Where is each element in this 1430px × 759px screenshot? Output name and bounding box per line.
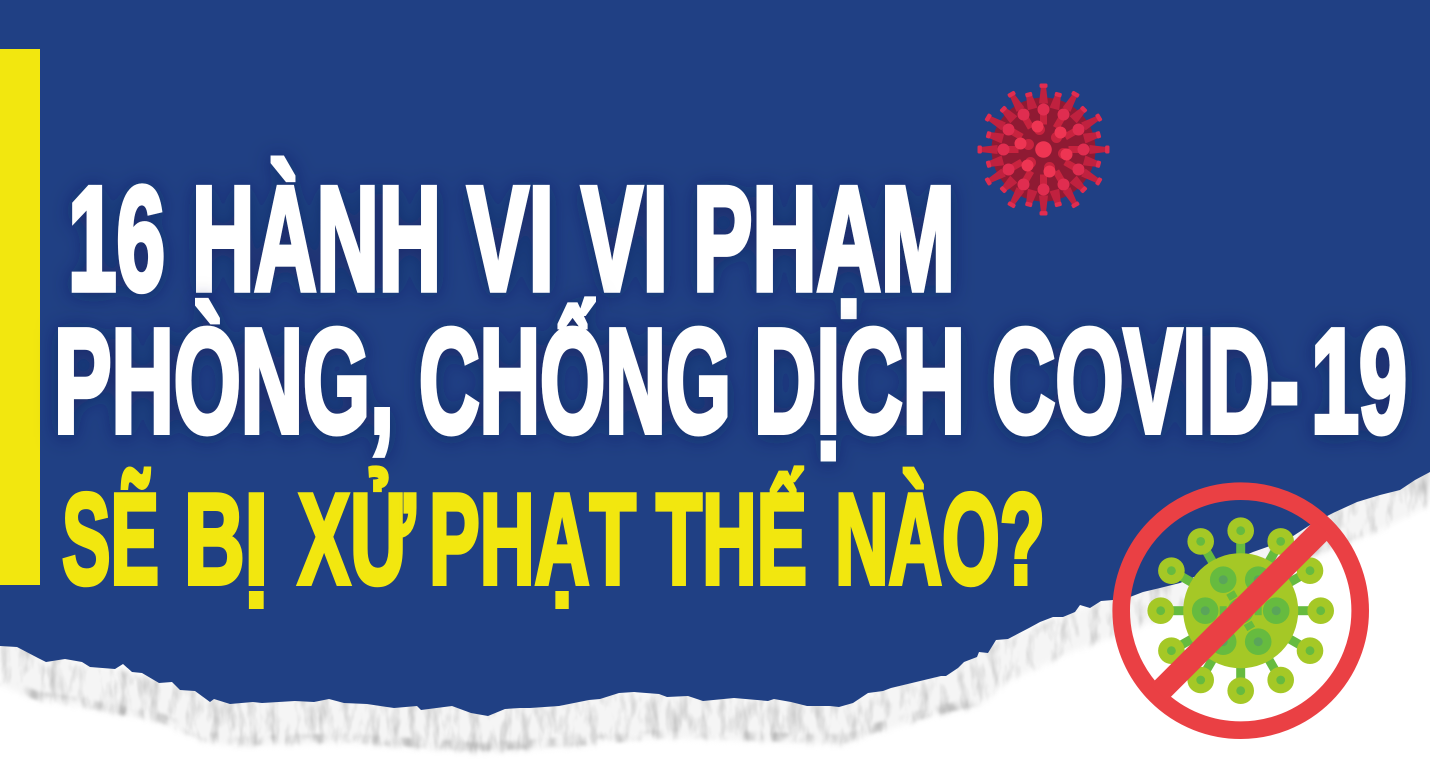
title line 3: XỬ (298, 466, 416, 612)
title line 3: NÀO? (835, 468, 1045, 612)
title line 2: DỊCH (754, 299, 965, 464)
virus body (1183, 553, 1298, 668)
title line 2: PHÒNG, (54, 299, 394, 464)
title line 1 (68, 157, 955, 322)
title line 1: VI (582, 157, 668, 322)
prohibition ring and slash (1121, 491, 1360, 730)
title line 3: BỊ (184, 468, 268, 612)
title line 1: 16 (68, 157, 165, 322)
torn paper edge (0, 465, 1430, 753)
virus stems (1173, 543, 1309, 679)
title line 1: HÀNH (192, 157, 441, 322)
title line 2 (54, 298, 1407, 464)
title line 1: VI (468, 157, 554, 322)
icon: prohibited green virus (1121, 491, 1360, 730)
virus tips (1147, 517, 1334, 704)
title line 3: SẼ (62, 468, 159, 612)
title line 1: PHẠM (693, 157, 955, 322)
icon: red coronavirus (978, 84, 1110, 216)
title line 3 (62, 466, 1045, 612)
virus inner cells (1192, 566, 1290, 655)
title line 2: CHỐNG (419, 298, 731, 464)
yellow accent bar (0, 49, 40, 585)
title line 3: THẾ (656, 466, 807, 612)
title line 3: PHẠT (429, 468, 636, 612)
